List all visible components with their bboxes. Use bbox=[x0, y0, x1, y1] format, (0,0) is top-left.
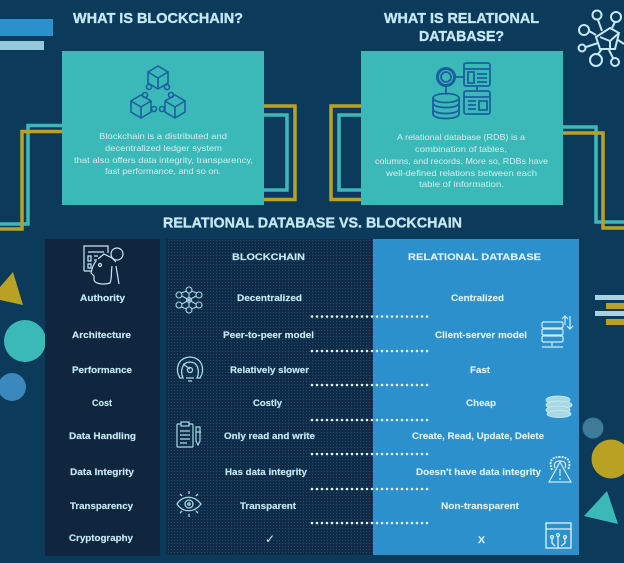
text: relational database description: columns, and records. More so, RDBs have bbox=[375, 156, 548, 166]
icon: eye bbox=[177, 491, 201, 517]
panel: relational database column bbox=[373, 239, 579, 555]
text: relational database description: combination of tables, bbox=[415, 144, 507, 154]
icon: head with data bbox=[84, 246, 123, 284]
text: Centralized: Centralized bbox=[451, 293, 504, 304]
connector lines: right bbox=[563, 127, 624, 228]
text: relational database description bbox=[375, 132, 548, 189]
text: Peer-to-peer model: Peer-to-peer model bbox=[223, 330, 314, 341]
icon: speed gauge bbox=[177, 357, 203, 381]
text: Client-server model: Client-server model bbox=[435, 330, 527, 341]
text: Doesn't have data integrity: Doesn't have data integrity bbox=[416, 467, 542, 478]
text: Transparent: Transparent bbox=[240, 501, 297, 512]
icon: blockchain cubes bbox=[131, 66, 185, 118]
text: check mark: ✓ bbox=[265, 532, 275, 546]
heading: what is relational database bbox=[384, 10, 539, 45]
panel: what is relational database bbox=[361, 51, 563, 205]
text: Create, Read, Update, Delete: Create, Read, Update, Delete bbox=[412, 431, 544, 442]
icon: coin stack bbox=[546, 396, 572, 418]
heading: blockchain column: BLOCKCHAIN bbox=[232, 252, 305, 263]
icon: clipboard and pen bbox=[177, 422, 201, 447]
heading: relational database column: RELATIONAL DATABASE bbox=[408, 252, 541, 263]
text: Non-transparent: Non-transparent bbox=[441, 501, 520, 512]
text: Cost: Cost bbox=[92, 398, 113, 409]
panel: categories column bbox=[45, 239, 160, 556]
panel: what is blockchain bbox=[62, 51, 264, 205]
text: relational database description: A relational database (RDB) is a bbox=[397, 132, 525, 142]
panel: blockchain column bbox=[166, 239, 373, 555]
icon: relational database bbox=[433, 63, 490, 118]
text: Has data integrity: Has data integrity bbox=[225, 467, 308, 478]
text: Decentralized: Decentralized bbox=[237, 293, 302, 304]
text: Only read and write: Only read and write bbox=[224, 431, 315, 442]
text: relational database description: table of information. bbox=[419, 179, 504, 189]
text: Costly: Costly bbox=[253, 398, 283, 409]
heading: what is blockchain: WHAT IS BLOCKCHAIN? bbox=[73, 10, 243, 27]
text: Architecture: Architecture bbox=[72, 330, 131, 341]
text: Authority: Authority bbox=[80, 293, 126, 304]
text: Data Integrity: Data Integrity bbox=[70, 467, 135, 478]
heading: what is relational database: WHAT IS RELATIONAL bbox=[384, 10, 539, 27]
icon: server with arrows bbox=[542, 316, 573, 347]
text: Relatively slower: Relatively slower bbox=[230, 365, 309, 376]
connector lines: between panels, left bracket bbox=[264, 106, 295, 200]
text: Data Handling: Data Handling bbox=[69, 431, 136, 442]
heading: what is relational database: DATABASE? bbox=[419, 28, 504, 45]
text: blockchain description: Blockchain is a distributed and bbox=[99, 131, 227, 141]
text: Cryptography: Cryptography bbox=[69, 533, 134, 544]
decorative shapes: left bbox=[0, 272, 46, 401]
heading: relational database vs blockchain: RELATIONAL DATABASE VS. BLOCKCHAIN bbox=[163, 214, 462, 232]
text: Transparency: Transparency bbox=[70, 501, 134, 512]
decorative bars: top left bbox=[0, 19, 53, 50]
text: X mark: X bbox=[478, 535, 486, 546]
icon: network cube, top right bbox=[578, 10, 624, 66]
connector lines: between panels, right bracket bbox=[331, 106, 361, 200]
text: Fast: Fast bbox=[470, 365, 491, 376]
decorative shapes: right bbox=[582, 295, 624, 524]
icon: browser with circuit bbox=[546, 523, 571, 548]
text: Cheap: Cheap bbox=[466, 398, 496, 409]
text: relational database description: well-defined relations between each bbox=[385, 168, 537, 178]
text: blockchain description: fast performance, and so on. bbox=[105, 166, 221, 176]
connector lines: left bbox=[0, 126, 62, 229]
text: blockchain description: decentralized ledger system bbox=[105, 143, 222, 153]
dotted row dividers bbox=[312, 316, 431, 523]
text: blockchain description: that also offers data integrity, transparency, bbox=[74, 155, 253, 165]
icon: warning with signal bbox=[549, 457, 571, 482]
text: Performance: Performance bbox=[72, 365, 132, 376]
icon: decentralized network bbox=[176, 287, 202, 313]
text: blockchain description bbox=[74, 131, 253, 176]
